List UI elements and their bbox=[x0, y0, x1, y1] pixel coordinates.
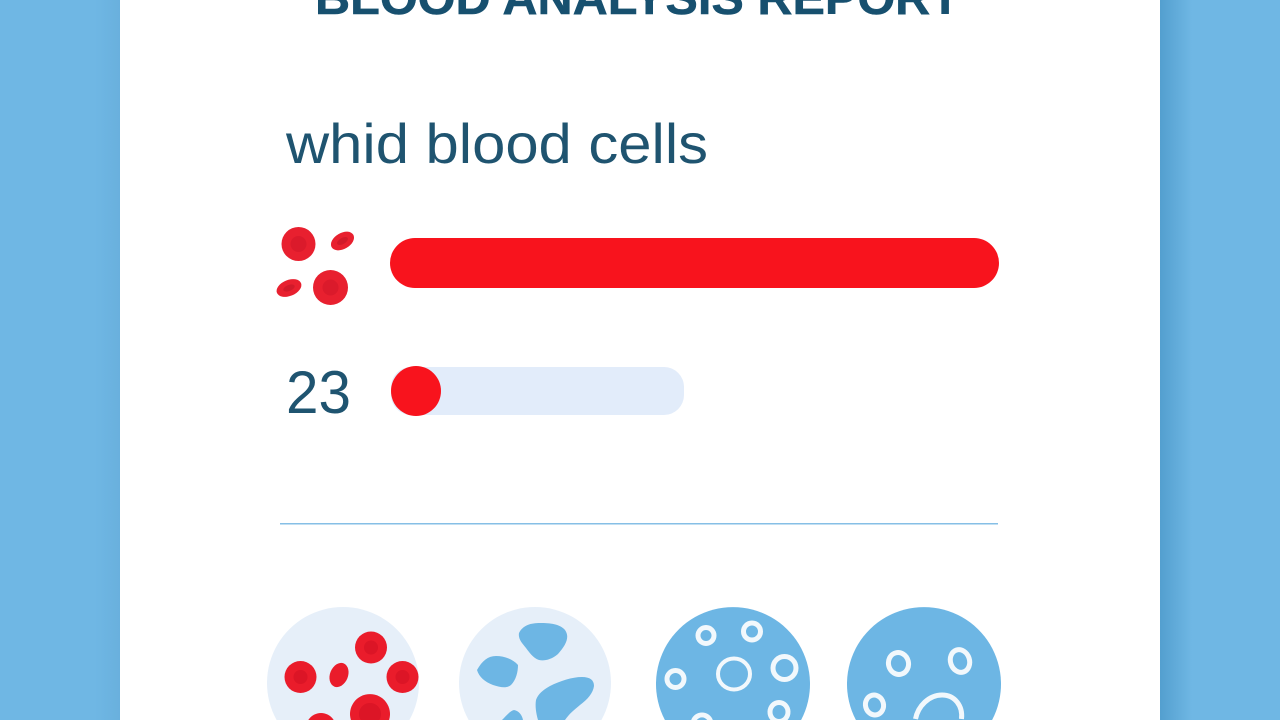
icon: large cell sample bbox=[847, 607, 1001, 720]
value: 23: 23 bbox=[286, 359, 351, 426]
bar: full red bbox=[390, 238, 999, 288]
icon: platelet sample bbox=[459, 607, 611, 720]
icon: white cell sample bbox=[656, 607, 810, 720]
icon: red blood cells bbox=[274, 227, 357, 305]
bar: short progress bbox=[391, 366, 684, 416]
heading: cells: whid blood cells bbox=[285, 112, 708, 175]
icon: red cell sample bbox=[267, 607, 419, 720]
